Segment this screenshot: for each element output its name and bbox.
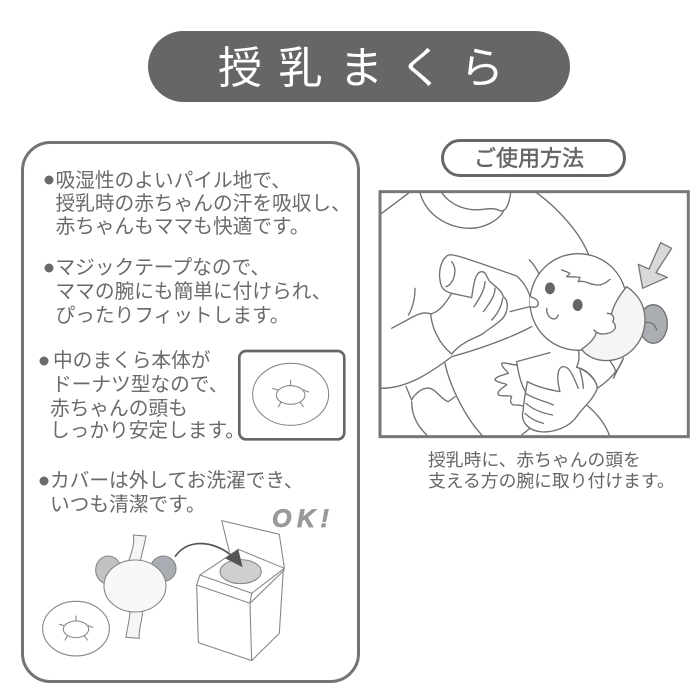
text block: absorbency: 授乳時の赤ちゃんの汗を吸収し、	[56, 193, 351, 215]
text block: washable	[40, 470, 303, 516]
text block: velcro: マジックテープなので、	[56, 257, 270, 279]
usage heading	[442, 140, 624, 176]
text block: absorbency	[44, 170, 351, 238]
text block: donut shape: しっかり安定します。	[50, 420, 245, 442]
text block: washable: カバーは外してお洗濯でき、	[50, 470, 303, 492]
arrow: points to pillow	[638, 243, 672, 288]
icon: washing machine	[197, 521, 284, 661]
icon: donut pillow in frame	[239, 351, 344, 439]
panel: features	[22, 142, 358, 682]
text block: washable: いつも清潔です。	[50, 494, 206, 516]
illustration: cover removed and washing machine	[43, 521, 284, 661]
arrow: into washer	[175, 544, 243, 567]
caption: 授乳時に、赤ちゃんの頭を	[428, 450, 641, 470]
text block: absorbency: 赤ちゃんもママも快適です。	[56, 216, 309, 238]
text block: donut shape: 赤ちゃんの頭も	[50, 398, 188, 420]
baby bottle and hand	[440, 255, 538, 354]
icon: donut pillow insert	[43, 601, 109, 656]
caption	[428, 450, 675, 491]
baby	[495, 254, 667, 435]
icon: pillow cover with strap	[96, 535, 176, 638]
text block: donut shape: 中のまくら本体が	[53, 350, 211, 372]
icon: OK label: OK!	[272, 505, 334, 533]
text block: velcro: ぴったりフィットします。	[56, 305, 289, 327]
text block: absorbency: 吸湿性のよいパイル地で、	[56, 170, 291, 192]
title: 授乳まくら	[218, 44, 520, 93]
text block: donut shape: ドーナツ型なので、	[52, 374, 228, 396]
caption: 支える方の腕に取り付けます。	[428, 471, 675, 491]
text block: velcro: ママの腕にも簡単に付けられ、	[56, 281, 331, 303]
text block: velcro	[44, 257, 331, 327]
title	[148, 31, 570, 102]
text block: donut shape	[40, 350, 245, 442]
usage heading: ご使用方法	[474, 146, 584, 171]
mother	[382, 193, 588, 435]
arm pillow	[582, 287, 645, 361]
panel: usage illustration	[380, 192, 688, 437]
